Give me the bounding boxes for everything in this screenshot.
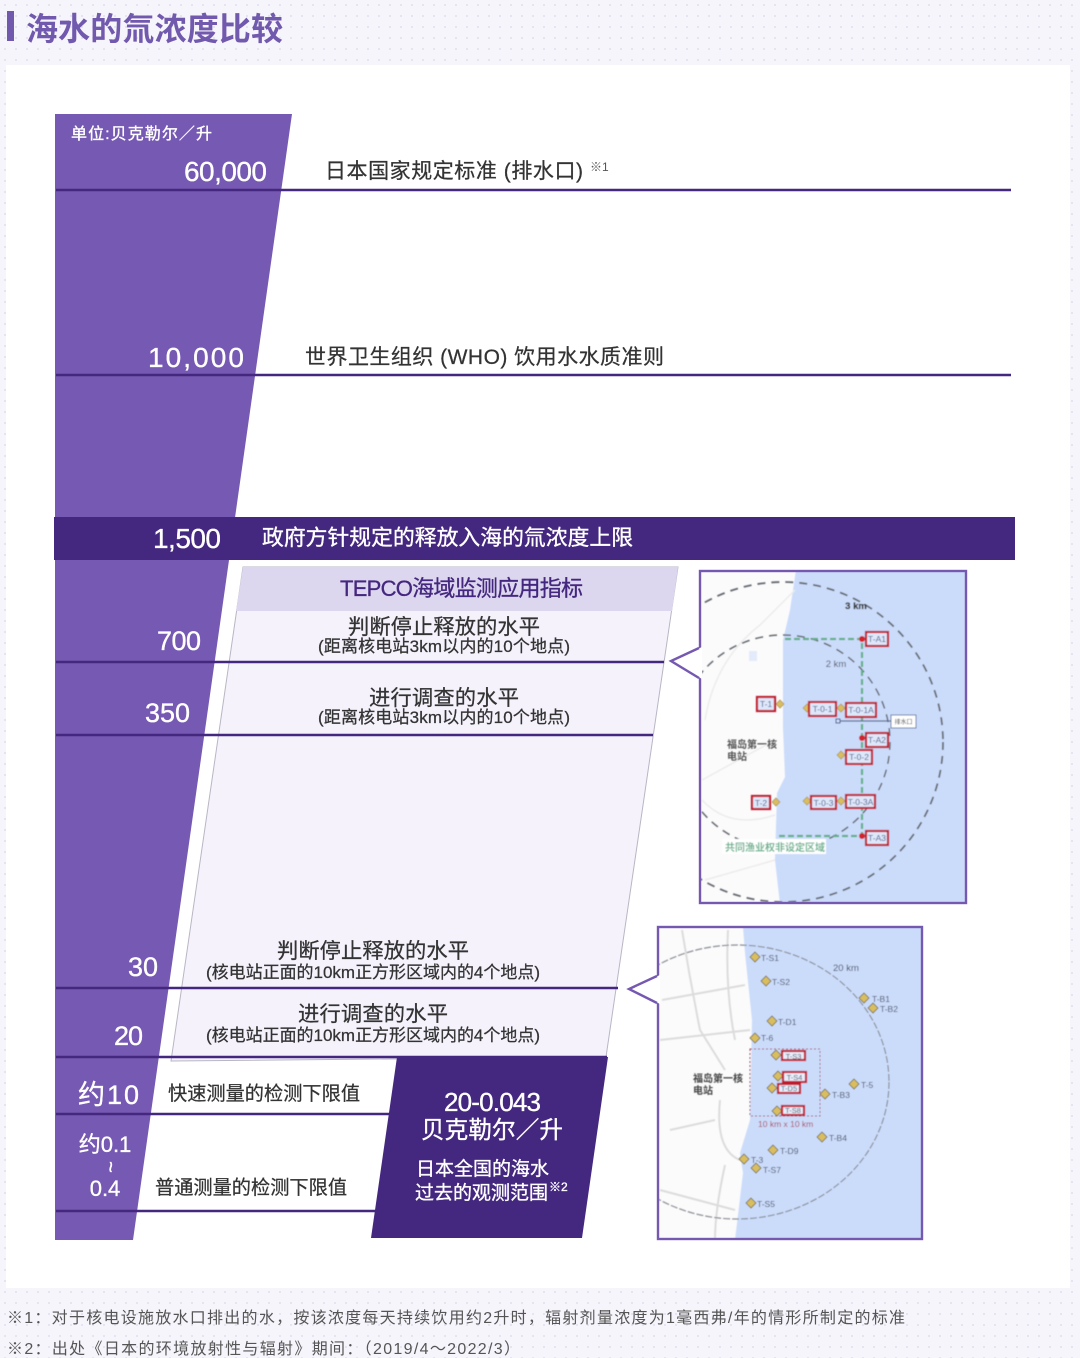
map: 20km monitoring points	[656, 926, 924, 1240]
value: about 0.1 to 0.4: 0.4	[90, 1176, 120, 1201]
map: 3km monitoring points: T-1	[760, 699, 772, 709]
label: WHO guideline: 世界卫生组织 (WHO) 饮用水水质准则	[305, 346, 664, 369]
map: 3km monitoring points: T-0-1A	[848, 705, 874, 715]
map: 3km monitoring points: T-A1	[868, 634, 886, 644]
level: investigate 10km	[206, 1002, 540, 1045]
value: 700: 700	[157, 626, 201, 656]
label: ordinary measurement limit: 普通测量的检测下限值	[155, 1177, 347, 1199]
callout: historic seawater range: 贝克勒尔／升	[421, 1117, 563, 1144]
callout: historic seawater range: 过去的观测范围	[415, 1182, 548, 1204]
map: 3km monitoring points: 3 km	[845, 601, 867, 612]
arrow: pointer to 20km map	[629, 975, 660, 1004]
label: Japan national standard: 日本国家规定标准 (排水口)	[325, 160, 583, 183]
level: investigate 3km	[318, 686, 570, 727]
map: 3km monitoring points: T-2	[755, 798, 767, 808]
map: 3km monitoring points: T-0-3	[814, 798, 834, 808]
level: stop 3km	[318, 615, 570, 656]
value: about 0.1 to 0.4: ~	[99, 1161, 121, 1173]
map: 20km monitoring points: T-S5	[757, 1199, 775, 1209]
map: 20km monitoring points: T-S2	[772, 977, 790, 987]
callout: historic seawater range	[371, 1057, 608, 1238]
map: 20km monitoring points: T-S1	[761, 953, 779, 963]
map: 3km monitoring points: T-0-1	[813, 704, 833, 714]
footnote 1: ※1：对于核电设施放水口排出的水，按该浓度每天持续饮用约2升时，辐射剂量浓度为1毫西弗/年的情形所制定的标准	[7, 1308, 905, 1327]
value: 60,000: 60,000	[184, 156, 267, 187]
band: 1,500 limit: 1,500	[153, 523, 221, 554]
map: 20km monitoring points: T-B4	[829, 1133, 847, 1143]
value: about 0.1 to 0.4	[79, 1132, 131, 1201]
map: 3km monitoring points: 电站	[727, 750, 747, 763]
level: investigate 10km: (核电站正面的10km正方形区域内的4个地点)	[206, 1026, 540, 1045]
value: 350: 350	[145, 698, 190, 728]
map: 20km monitoring points: T-S3	[786, 1052, 801, 1061]
map: 20km monitoring points: T-B3	[832, 1090, 850, 1100]
callout: historic seawater range: ※2	[549, 1180, 568, 1194]
arrow: pointer to 3km map	[671, 647, 702, 679]
footnote 2: ※2：出处《日本的环境放射性与辐射》期间：（2019/4～2022/3）	[7, 1339, 520, 1358]
label: rapid measurement limit: 快速测量的检测下限值	[168, 1083, 360, 1105]
map: 3km monitoring points: T-A2	[868, 735, 886, 745]
map: 20km monitoring points: T-S7	[763, 1165, 781, 1175]
band: 1,500 limit: 政府方针规定的释放入海的氚浓度上限	[262, 525, 633, 550]
level: stop 10km	[206, 939, 540, 982]
map: 3km monitoring points	[698, 570, 968, 904]
map: 20km monitoring points: T-D1	[778, 1017, 797, 1027]
callout: historic seawater range: 日本全国的海水	[416, 1158, 549, 1180]
value: 10,000: 10,000	[148, 342, 244, 373]
map: 3km monitoring points: 福岛第一核	[727, 738, 777, 751]
map: 20km monitoring points: 10 km x 10 km	[758, 1119, 813, 1129]
value: about 0.1 to 0.4: 约0.1	[79, 1132, 131, 1157]
level: stop 3km: 判断停止释放的水平	[348, 615, 540, 639]
band: 1,500 limit	[54, 517, 1015, 560]
value: 30: 30	[128, 952, 158, 982]
map: 20km monitoring points: T-B2	[880, 1004, 898, 1014]
level: investigate 3km: (距离核电站3km以内的10个地点)	[318, 708, 570, 727]
map: 20km monitoring points: 福岛第一核	[693, 1072, 743, 1085]
level: stop 3km: (距离核电站3km以内的10个地点)	[318, 637, 570, 656]
level: stop 10km: 判断停止释放的水平	[277, 939, 469, 963]
title: 海水的氚浓度比较	[26, 11, 283, 47]
map: 20km monitoring points: T-S8	[785, 1106, 801, 1115]
map: 20km monitoring points: T-D5	[781, 1084, 797, 1093]
map: 20km monitoring points: T-3	[751, 1155, 764, 1165]
map: 3km monitoring points: 排水口	[894, 718, 913, 726]
map: 20km monitoring points: T-B1	[872, 994, 890, 1004]
map: 20km monitoring points: 20 km	[833, 963, 859, 974]
map: 3km monitoring points: T-0-3A	[848, 797, 874, 807]
level: investigate 3km: 进行调查的水平	[369, 686, 519, 710]
value: 20: 20	[114, 1021, 143, 1051]
value: about 10: 约10	[78, 1080, 139, 1110]
level: investigate 10km: 进行调查的水平	[298, 1002, 448, 1026]
unit label: 单位:贝克勒尔／升	[71, 125, 212, 143]
label: Japan national standard: ※1	[590, 160, 609, 174]
map: 3km monitoring points: T-A3	[868, 833, 886, 843]
callout: historic seawater range: 20-0.043	[444, 1087, 541, 1117]
scale wedge	[55, 114, 292, 1240]
panel header	[236, 567, 678, 611]
map: 3km monitoring points: 2 km	[826, 659, 846, 670]
map: 20km monitoring points: T-6	[761, 1033, 774, 1043]
map: 20km monitoring points: 电站	[693, 1084, 713, 1097]
map: 20km monitoring points: T-D9	[780, 1146, 799, 1156]
map: 20km monitoring points: T-S4	[787, 1073, 802, 1082]
map: 3km monitoring points: 共同渔业权非设定区域	[725, 841, 825, 854]
map: 20km monitoring points: T-5	[861, 1080, 874, 1090]
monitoring indicators panel	[171, 567, 678, 1061]
map: 3km monitoring points: T-0-2	[849, 752, 869, 762]
level: stop 10km: (核电站正面的10km正方形区域内的4个地点)	[206, 963, 540, 982]
panel header: TEPCO海域监测应用指标	[340, 576, 583, 601]
